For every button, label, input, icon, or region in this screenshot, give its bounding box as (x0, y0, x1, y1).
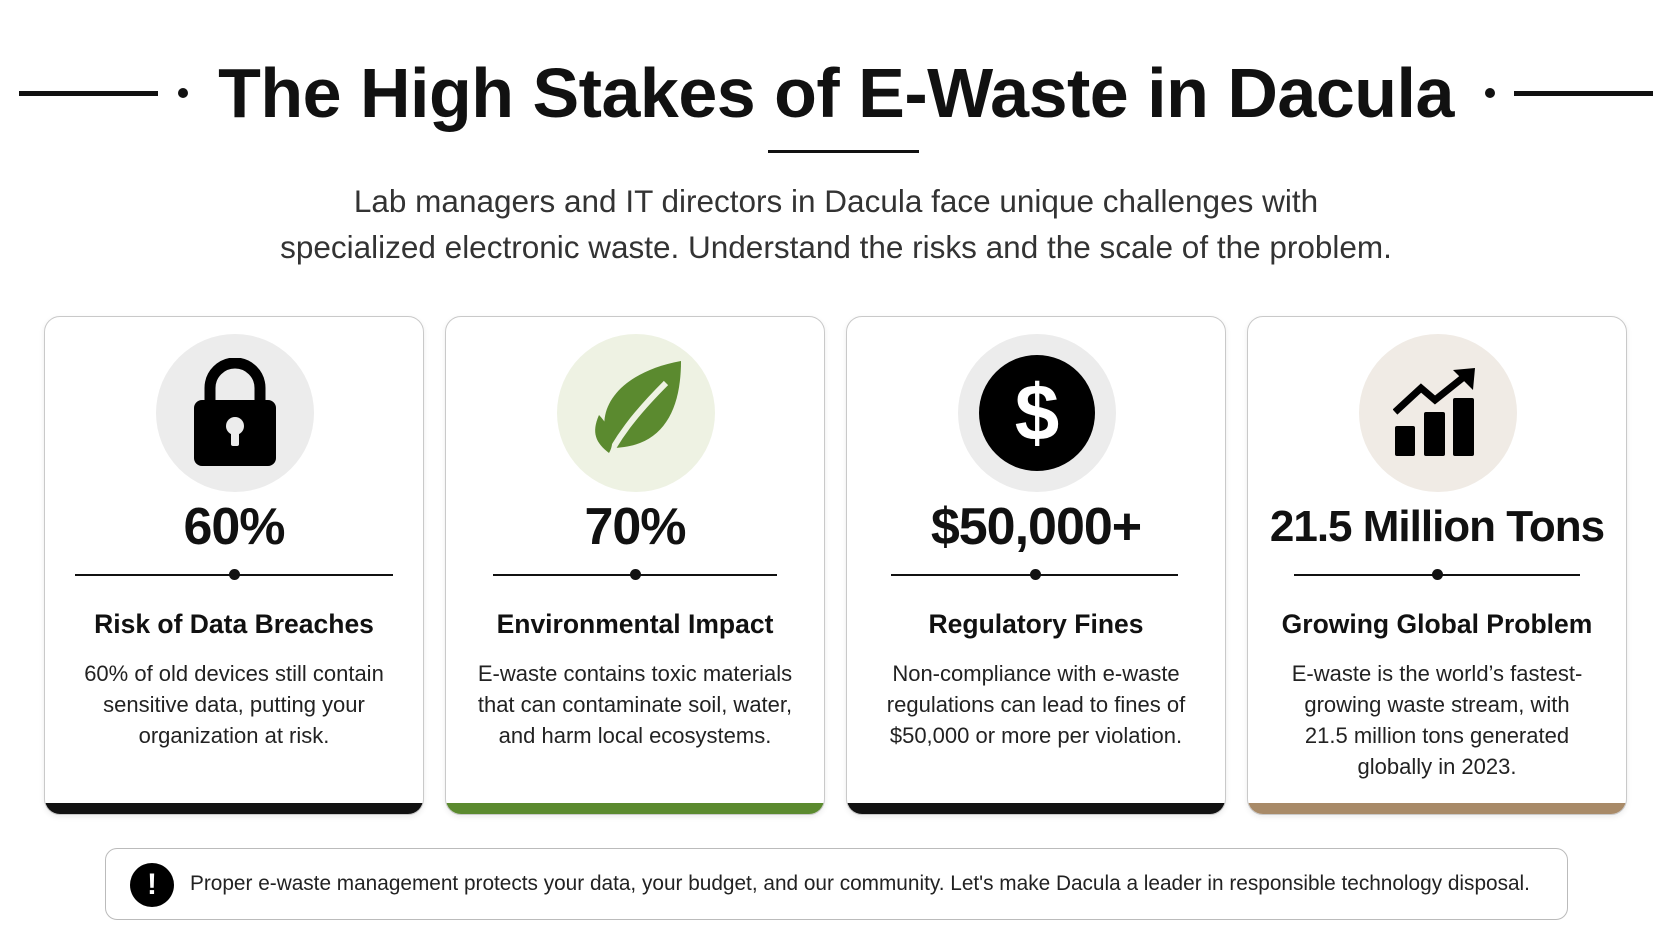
text: Non-compliance with e-waste regulations can lead to fines of $50,000 or more per violation. (887, 661, 1185, 748)
icon: exclamation (130, 863, 174, 907)
heading: Environmental Impact (497, 609, 773, 639)
decorative title lines left (19, 91, 158, 96)
callout footer (105, 848, 1568, 920)
footer text: Proper e-waste management protects your data, your budget, and our community. Let's make Dacula a leader in responsible technology disposal. (190, 872, 1530, 895)
stat: 70% (584, 498, 686, 556)
subtitle: Lab managers and IT directors in Dacula face unique challenges with (354, 183, 1318, 219)
text: 60% of old devices still contain sensitive data, putting your organization at risk. (84, 661, 384, 748)
icon: chart (1359, 334, 1517, 492)
heading: Growing Global Problem (1282, 609, 1592, 639)
icon: dollar: $ (1015, 368, 1059, 457)
panel: data breaches (44, 316, 424, 815)
panel: environmental (445, 316, 825, 815)
heading: Regulatory Fines (928, 609, 1144, 639)
icon: leaf (557, 334, 715, 492)
stat: $50,000+ (931, 498, 1141, 556)
heading: Risk of Data Breaches (94, 609, 374, 639)
icon: lock (156, 334, 314, 492)
icon: exclamation: ! (147, 868, 157, 901)
panel: global problem (1247, 316, 1627, 815)
subtitle: specialized electronic waste. Understand the risks and the scale of the problem. (280, 229, 1392, 265)
text: E-waste contains toxic materials that can contaminate soil, water, and harm local ecosystems. (478, 661, 792, 748)
subtitle (280, 183, 1392, 265)
icon: dollar (958, 334, 1116, 492)
panel: fines (846, 316, 1226, 815)
text: E-waste is the world’s fastest-growing waste stream, with 21.5 million tons generated globally in 2023. (1292, 661, 1582, 779)
title: The High Stakes of E-Waste in Dacula (218, 54, 1454, 132)
stat: 60% (183, 498, 285, 556)
stat: 21.5 Million Tons (1270, 502, 1604, 551)
